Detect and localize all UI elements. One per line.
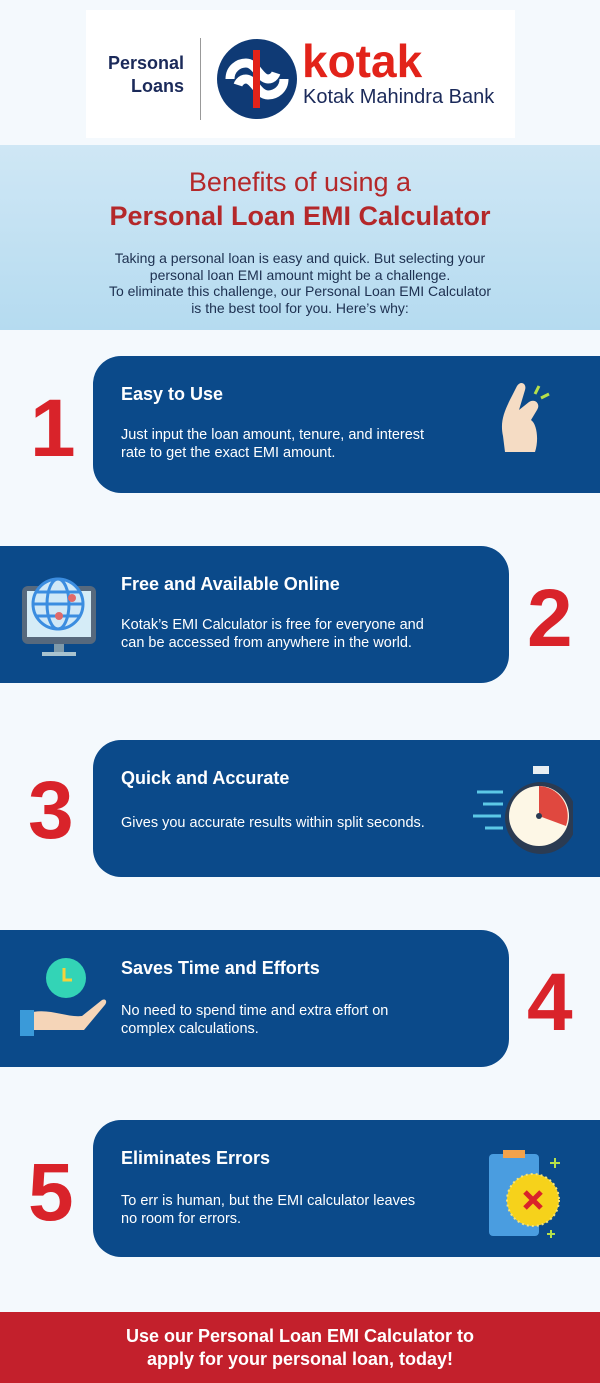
panel: eliminates errors: To err is human, but the EMI calculator leaves bbox=[121, 1193, 415, 1209]
text: Personal Loans: Loans bbox=[131, 76, 184, 96]
icon: clipboard with X bbox=[489, 1150, 560, 1238]
title: Personal Loan EMI Calculator bbox=[109, 201, 491, 231]
footer CTA: Use our Personal Loan EMI Calculator to bbox=[126, 1326, 474, 1346]
icon: kotak logo bbox=[217, 39, 297, 119]
intro text: To eliminate this challenge, our Personal Loan EMI Calculator bbox=[109, 283, 491, 299]
panel: saves time: Saves Time and Efforts bbox=[121, 958, 320, 978]
panel: easy to use bbox=[93, 356, 600, 493]
number 1: 1 bbox=[30, 383, 76, 474]
panel: easy to use: Easy to Use bbox=[121, 384, 223, 404]
panel: quick and accurate: Gives you accurate results within split seconds. bbox=[121, 815, 425, 831]
footer CTA bbox=[0, 1312, 600, 1383]
number 2: 2 bbox=[527, 573, 573, 664]
panel: eliminates errors bbox=[93, 1120, 600, 1257]
icon: stopwatch bbox=[473, 766, 573, 854]
panel: easy to use: rate to get the exact EMI amount. bbox=[121, 445, 335, 461]
title bbox=[109, 167, 491, 231]
text: Personal Loans: Personal bbox=[108, 53, 184, 73]
panel: free and available online: can be accessed from anywhere in the world. bbox=[121, 635, 412, 651]
panel: saves time: complex calculations. bbox=[121, 1021, 259, 1037]
title: Benefits of using a bbox=[189, 167, 411, 197]
panel: free and available online: Free and Available Online bbox=[121, 574, 340, 594]
text: Personal Loans bbox=[108, 53, 184, 96]
panel: free and available online: Kotak’s EMI Calculator is free for everyone and bbox=[121, 617, 424, 633]
icon: hand with clock bbox=[20, 958, 106, 1036]
header logo box: Kotak Mahindra Bank bbox=[303, 86, 494, 108]
icon: monitor globe bbox=[22, 578, 96, 656]
number 5: 5 bbox=[28, 1147, 74, 1238]
header logo box bbox=[86, 10, 515, 138]
text: kotak brand: kotak bbox=[302, 35, 422, 87]
number 4: 4 bbox=[527, 957, 573, 1048]
panel: eliminates errors: no room for errors. bbox=[121, 1211, 241, 1227]
number 3: 3 bbox=[28, 765, 74, 856]
intro text bbox=[109, 250, 491, 316]
panel: free and available online bbox=[0, 546, 509, 683]
panel: easy to use: Just input the loan amount, tenure, and interest bbox=[121, 427, 424, 443]
intro text: Taking a personal loan is easy and quick. But selecting your bbox=[115, 250, 485, 266]
panel: quick and accurate bbox=[93, 740, 600, 877]
intro text: personal loan EMI amount might be a challenge. bbox=[150, 266, 450, 282]
panel: quick and accurate: Quick and Accurate bbox=[121, 768, 289, 788]
footer CTA: apply for your personal loan, today! bbox=[147, 1349, 453, 1369]
panel: saves time bbox=[0, 930, 509, 1067]
icon: snapping hand bbox=[502, 383, 550, 452]
intro text: is the best tool for you. Here’s why: bbox=[191, 300, 409, 316]
intro band bbox=[0, 145, 600, 330]
panel: eliminates errors: Eliminates Errors bbox=[121, 1148, 270, 1168]
panel: saves time: No need to spend time and extra effort on bbox=[121, 1003, 388, 1019]
